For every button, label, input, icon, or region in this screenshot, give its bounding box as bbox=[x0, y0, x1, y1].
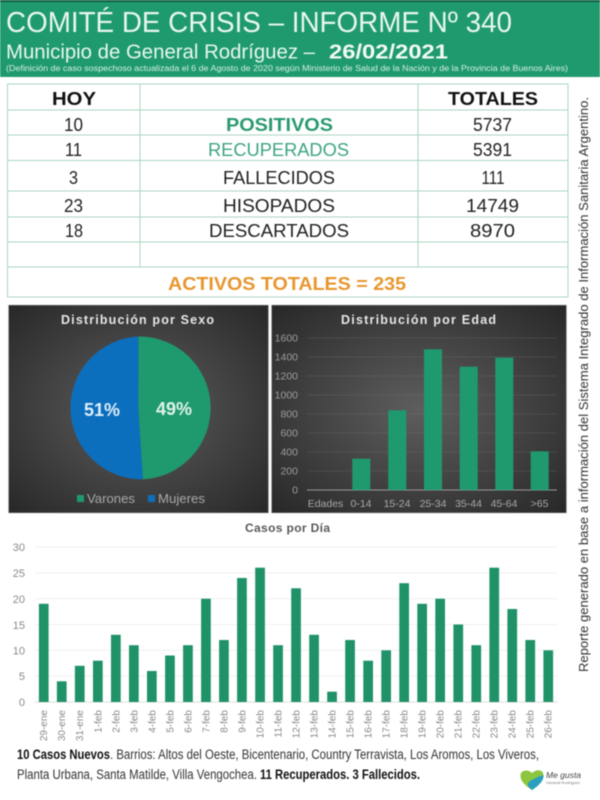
daily bar chart: 16-feb bbox=[364, 710, 375, 738]
pie chart: 49% bbox=[156, 399, 192, 419]
daily bar chart: 18-feb bbox=[400, 710, 411, 738]
daily bar chart: 22-feb bbox=[472, 710, 483, 738]
daily bar chart: 20-feb bbox=[436, 710, 447, 738]
daily bar chart: 14-feb bbox=[328, 710, 338, 738]
daily bar chart: 25 bbox=[13, 568, 25, 580]
row: recuperados bbox=[65, 140, 512, 160]
daily bar chart: 0 bbox=[19, 697, 25, 709]
logo: Me gusta bbox=[520, 770, 581, 790]
row: positivos: 5737 bbox=[473, 115, 512, 135]
daily bar chart: 23-feb bbox=[490, 710, 501, 738]
daily bar chart: 10-feb bbox=[256, 710, 266, 738]
age chart title: Distribución por Edad bbox=[341, 313, 496, 327]
daily bar chart: 10 bbox=[13, 646, 25, 658]
daily bar chart: 25-feb bbox=[526, 710, 537, 738]
daily bar chart: 15 bbox=[13, 620, 25, 632]
row: hisopados: 23 bbox=[64, 196, 83, 216]
daily bar chart: 11-feb bbox=[274, 710, 284, 738]
daily bar chart: 31-ene bbox=[75, 710, 86, 741]
row: positivos: POSITIVOS bbox=[226, 115, 333, 135]
daily bar chart: 20 bbox=[13, 594, 25, 606]
age bar chart: 1400 bbox=[275, 352, 298, 364]
row: fallecidos: 3 bbox=[69, 168, 78, 188]
age bar chart: 600 bbox=[280, 428, 298, 440]
row: hisopados bbox=[64, 196, 519, 216]
row: descartados: 18 bbox=[65, 221, 83, 241]
daily bar chart: 21-feb bbox=[454, 710, 465, 738]
logo: Me gusta: Me gusta bbox=[546, 770, 581, 780]
age bar chart: 1200 bbox=[275, 370, 298, 382]
age bar chart: 0-14 bbox=[350, 498, 372, 510]
subtitle bbox=[6, 42, 448, 64]
summary text bbox=[17, 747, 539, 782]
title: COMITÉ DE CRISIS – INFORME Nº 340 bbox=[6, 6, 512, 39]
daily bar chart: 1-feb bbox=[93, 710, 104, 733]
logo: Me gusta: General Rodríguez bbox=[546, 780, 580, 785]
daily bar chart: 5 bbox=[19, 671, 25, 683]
age bar chart: 1000 bbox=[275, 390, 298, 402]
daily bar chart: 7-feb bbox=[201, 710, 212, 733]
age bar chart: 0 bbox=[292, 484, 298, 496]
daily bar chart: 19-feb bbox=[418, 710, 429, 738]
daily bar chart: 9-feb bbox=[237, 710, 248, 733]
daily chart title: Casos por Día bbox=[245, 521, 330, 535]
summary text: 11 Recuperados. 3 Fallecidos. bbox=[260, 767, 420, 782]
row: fallecidos bbox=[69, 168, 504, 188]
age bar chart: 800 bbox=[280, 408, 298, 420]
age bar chart bbox=[275, 332, 557, 510]
age bar chart: 35-44 bbox=[455, 498, 482, 510]
summary text: 10 Casos Nuevos bbox=[17, 747, 110, 762]
table header row bbox=[52, 89, 538, 109]
row: recuperados: 5391 bbox=[473, 140, 512, 160]
age bar chart: 400 bbox=[280, 446, 298, 458]
panel: distribution by age bbox=[272, 305, 566, 513]
panel: distribution by sex bbox=[8, 305, 268, 513]
daily bar chart: 29-ene bbox=[39, 710, 50, 741]
age bar chart: 25-34 bbox=[420, 498, 447, 510]
daily bar chart: 13-feb bbox=[310, 710, 320, 738]
row: fallecidos: 111 bbox=[482, 168, 504, 188]
daily bar chart: 12-feb bbox=[292, 710, 302, 738]
age bar chart: 15-24 bbox=[384, 498, 411, 510]
panel: cases per day bbox=[13, 521, 558, 741]
row: descartados: 8970 bbox=[470, 221, 515, 241]
data table bbox=[8, 84, 568, 297]
row: hisopados: HISOPADOS bbox=[223, 196, 335, 216]
header band bbox=[0, 0, 600, 77]
daily bar chart: 17-feb bbox=[382, 710, 393, 738]
icon: heart bbox=[520, 770, 544, 790]
pie legend: Varones bbox=[87, 492, 135, 506]
pie chart bbox=[70, 336, 211, 479]
row: fallecidos: FALLECIDOS bbox=[223, 168, 335, 188]
pie legend bbox=[77, 492, 205, 506]
table header row: HOY bbox=[52, 89, 96, 109]
row: positivos: 10 bbox=[64, 115, 83, 135]
daily bar chart: 5-feb bbox=[165, 710, 176, 733]
age bar chart: 45-64 bbox=[491, 498, 518, 510]
daily bar chart: 8-feb bbox=[219, 710, 230, 733]
daily bar chart: 3-feb bbox=[129, 710, 140, 733]
daily bar chart: 15-feb bbox=[346, 710, 356, 738]
age bar chart: >65 bbox=[531, 498, 549, 510]
subtitle: Municipio de General Rodríguez – bbox=[6, 42, 316, 64]
daily bar chart bbox=[13, 542, 558, 741]
daily bar chart: 6-feb bbox=[183, 710, 194, 733]
daily bar chart: 30 bbox=[13, 542, 25, 554]
pie chart: 51% bbox=[84, 400, 120, 420]
row: positivos bbox=[64, 115, 512, 135]
active totals: ACTIVOS TOTALES = 235 bbox=[168, 274, 406, 294]
row: hisopados: 14749 bbox=[466, 196, 519, 216]
daily bar chart: 26-feb bbox=[544, 710, 555, 738]
age bar chart: 1600 bbox=[275, 332, 298, 344]
pie legend: Mujeres bbox=[158, 492, 205, 506]
age bar chart: 200 bbox=[280, 466, 298, 478]
daily bar chart: 2-feb bbox=[111, 710, 122, 733]
row: descartados bbox=[65, 221, 515, 241]
table header row: TOTALES bbox=[448, 89, 538, 109]
row: descartados: DESCARTADOS bbox=[209, 221, 349, 241]
daily bar chart: 4-feb bbox=[147, 710, 158, 733]
summary text: Planta Urbana, Santa Matilde, Villa Vengochea. bbox=[17, 767, 257, 782]
side note: Reporte generado en base a información del Sistema Integrado de Información Sanitaria Argentino. bbox=[577, 97, 591, 672]
subtitle: 26/02/2021 bbox=[329, 42, 448, 64]
definition note: (Definición de caso sospechoso actualizada el 6 de Agosto de 2020 según Ministerio de Salud de la Nación y de la Provincia de Buenos Aires) bbox=[6, 64, 568, 73]
pie title: Distribución por Sexo bbox=[61, 313, 214, 327]
daily bar chart: 24-feb bbox=[508, 710, 519, 738]
row: recuperados: 11 bbox=[65, 140, 82, 160]
daily bar chart: 30-ene bbox=[57, 710, 68, 741]
row: recuperados: RECUPERADOS bbox=[208, 140, 349, 160]
age bar chart: Edades bbox=[308, 498, 343, 510]
